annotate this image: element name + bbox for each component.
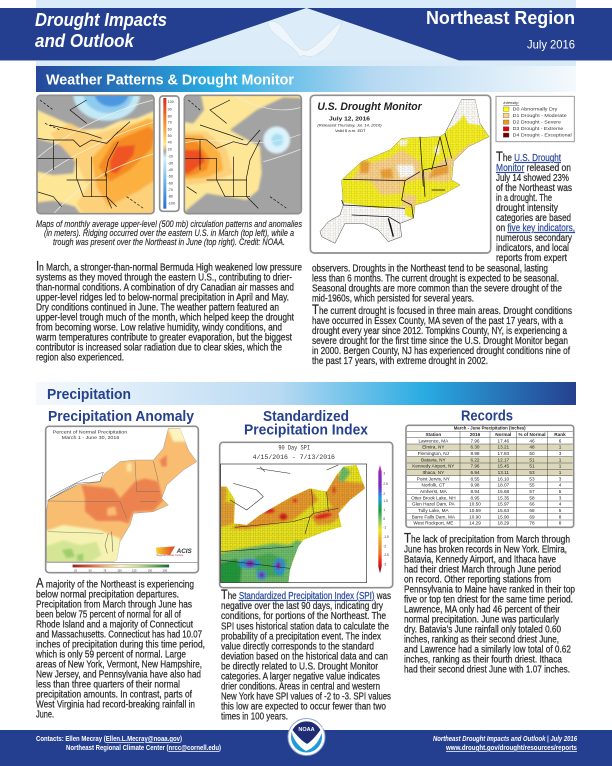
text: records narrative: normal precipitation. June was particularly — [404, 614, 559, 626]
table: March-June precipitation records: Norfolk, CT — [422, 483, 445, 488]
table: March-June precipitation records: 17.46 — [498, 438, 510, 443]
legend: drought intensity: D4 Drought - Exceptional — [513, 133, 572, 138]
icon: NOAA logo: NOAA — [298, 727, 315, 733]
map: March upper-level anomalies — [36, 94, 155, 214]
table: March-June precipitation records: 6.22 — [470, 457, 480, 462]
table: March-June precipitation records: 4 — [559, 483, 562, 488]
panel: percent of normal precipitation map: March 1 - June 30, 2016 — [62, 435, 120, 440]
text: U.S. Drought Monitor narrative: categories are based — [496, 213, 571, 224]
text: records narrative: June has broken records in New York. Elmira, — [404, 544, 567, 556]
text: current drought areas: drought every year since 2012. Tompkins County, NY, is experiencing a — [312, 326, 567, 337]
header: navy banner with triangle cut-out — [0, 8, 612, 60]
text: U.S. Drought Monitor narrative: of the Northeast was — [496, 183, 572, 194]
icon: NOAA bird watermark — [268, 21, 342, 57]
text: SPI narrative: negative over the last 90 days, indicating dry — [221, 601, 383, 612]
text: SPI narrative: SPI uses historical station data to calculate the — [221, 622, 389, 632]
table: March-June precipitation records — [406, 425, 574, 527]
legend: SPI scale — [378, 465, 389, 573]
section banner: Precipitation: Precipitation — [47, 386, 131, 403]
panel: percent of normal precipitation map — [43, 425, 198, 573]
panel: percent of normal precipitation map: Percent of Normal Precipitation — [53, 429, 128, 434]
text: records narrative — [404, 530, 575, 676]
text: U.S. Drought Monitor narrative: Monitor released on — [496, 163, 571, 174]
text: records narrative: Pennsylvania to Maine have ranked in their top — [404, 584, 575, 596]
table: March-June precipitation records: 7.96 — [470, 464, 480, 469]
text: March through June weather patterns: Dry conditions continued in June. The weather pattern featured an — [36, 302, 279, 314]
panel: U.S. Drought Monitor map — [310, 95, 492, 253]
table: March-June precipitation records: 8.98 — [470, 451, 480, 456]
legend: anomaly colour scale: -60 — [168, 181, 173, 185]
table: March-June precipitation records: 12.17 — [498, 457, 510, 462]
text: precipitation anomaly narrative: June. — [36, 710, 54, 720]
section banner: Precipitation — [36, 382, 576, 405]
legend: SPI scale: -3 — [383, 563, 386, 567]
legend: percent of normal scale: 200 — [163, 568, 168, 572]
table: March-June precipitation records: Elmira, NY — [422, 445, 444, 450]
legend: anomaly colour scale: 100 — [168, 100, 174, 104]
legend: anomaly colour scale: 20 — [168, 148, 172, 152]
table: March-June precipitation records: March - June Precipitation (inches) — [454, 426, 526, 431]
table: March-June precipitation records: 8.94 — [470, 489, 480, 494]
table: March-June precipitation records: 7.96 — [470, 438, 480, 443]
table: March-June precipitation records: 1 — [559, 470, 562, 475]
text: SPI narrative: this low are expected to occur fewer than two — [221, 702, 386, 712]
legend: anomaly colour scale: -100 — [168, 201, 175, 205]
legend: SPI scale: -2 — [383, 544, 386, 548]
text: records narrative: inches, ranking as their fourth driest. Ithaca — [404, 654, 562, 666]
table: March-June precipitation records: 51 — [529, 457, 535, 462]
table: March-June precipitation records: Tully Lake, MA — [418, 508, 450, 513]
legend: drought intensity: D1 Drought - Moderate — [513, 113, 567, 118]
text: current drought areas: severe drought for the first time since the U.S. Drought Monitor began — [312, 336, 568, 347]
table: March-June precipitation records: Glen Hazel Dam, PA — [412, 502, 456, 507]
title: U.S. Drought Monitor: U.S. Drought Monitor — [317, 101, 422, 113]
text: precipitation anomaly narrative: which is only 59 percent of normal. Large — [35, 650, 186, 660]
text: U.S. Drought Monitor narrative: mid-1960s, which persisted for several years. — [312, 294, 474, 304]
table: March-June precipitation records: 8 — [559, 514, 562, 519]
table: March-June precipitation records: 66 — [529, 502, 535, 507]
text: SPI narrative: times in 100 years. — [221, 712, 288, 722]
text: March through June weather patterns: warm temperatures contribute to greater evaporation, but the biggest — [35, 332, 292, 344]
footer: report reference — [433, 734, 578, 752]
text: precipitation anomaly narrative: precipitation amounts. In contrast, parts of — [36, 690, 192, 700]
legend: anomaly colour scale: -30 — [168, 161, 173, 165]
text: SPI narrative: conditions, for portions of the Northeast. The — [221, 611, 386, 622]
text: U.S. Drought Monitor narrative: less than 6 months. The current drought is expected to be seasonal. — [312, 274, 559, 284]
legend: SPI scale: -1 — [383, 525, 386, 529]
caption: circulation map description — [36, 219, 302, 248]
table: March-June precipitation records: 14.29 — [469, 521, 481, 526]
legend: percent of normal scale — [73, 565, 169, 572]
legend: anomaly colour scale: 50 — [168, 134, 172, 138]
text: March through June weather patterns: systems as they moved through the eastern U.S., contributing to drier- — [36, 272, 292, 284]
table: March-June precipitation records: 57 — [529, 489, 535, 494]
table: March-June precipitation records: 8.55 — [470, 476, 480, 481]
text: records narrative: had their driest March through June period — [404, 564, 561, 576]
heading: Drought Impacts and Outlook: and Outlook — [35, 30, 136, 51]
section banner: Weather Patterns & Drought Monitor — [36, 66, 576, 92]
table: March-June precipitation records: 6 — [559, 438, 562, 443]
legend: percent of normal scale: 100 — [117, 568, 122, 572]
legend: percent of normal scale: 125 — [132, 568, 137, 572]
text: precipitation anomaly narrative: areas of New York, Vermont, New Hampshire, — [36, 660, 202, 670]
table: March-June precipitation records: 15.68 — [498, 489, 510, 494]
text: precipitation anomaly narrative — [35, 576, 205, 720]
text: precipitation anomaly narrative: and Massachusetts. Connecticut has had 10.07 — [36, 630, 202, 640]
legend: anomaly colour scale: 80 — [168, 114, 172, 118]
legend: SPI scale: 2.5 — [383, 482, 388, 486]
table: March-June precipitation records: 2016 — [470, 432, 481, 437]
text: March through June weather patterns: contributor is increased solar radiation due to clear skies, which the — [36, 342, 282, 354]
legend: SPI scale: 1 — [383, 508, 385, 512]
legend: anomaly colour scale: 40 — [168, 141, 172, 145]
table: March-June precipitation records: 10.50 — [469, 502, 481, 507]
table: March-June precipitation records: 15.63 — [498, 508, 510, 513]
legend: drought intensity: D2 Drought - Severe — [513, 119, 562, 124]
text: SPI narrative: drier conditions. Areas in central and western — [221, 682, 380, 692]
table: March-June precipitation records: Otter Brook Lake, NH — [411, 495, 456, 500]
table: March-June precipitation records: 6.94 — [470, 470, 480, 475]
text: precipitation anomaly narrative: West Virginia had record-breaking rainfall in — [36, 700, 195, 710]
table: March-June precipitation records: 9.98 — [470, 483, 480, 488]
icon: NOAA logo — [288, 718, 325, 756]
caption: circulation map description: Maps of monthly average upper-level (500 mb) circulation patterns and anomalies — [36, 219, 302, 230]
footer: contacts: Northeast Regional Climate Center (nrcc@cornell.edu) — [66, 743, 221, 752]
panel: 90 day SPI map: 4/15/2016 - 7/13/2016 — [253, 454, 335, 461]
table: March-June precipitation records: 5 — [559, 508, 562, 513]
table: March-June precipitation records: Flemington, NJ — [418, 451, 449, 456]
table: March-June precipitation records: 58 — [529, 495, 535, 500]
table: March-June precipitation records: 50 — [529, 451, 535, 456]
legend: percent of normal scale: 75 — [103, 568, 107, 572]
table: March-June precipitation records: 5 — [559, 489, 562, 494]
table: March-June precipitation records: Amherst, MA — [420, 489, 448, 494]
legend: percent of normal scale: 25 — [74, 568, 77, 572]
table: March-June precipitation records: 15.35 — [498, 495, 510, 500]
legend: anomaly colour scale: -80 — [168, 195, 173, 199]
table: March-June precipitation records: 8.95 — [470, 495, 480, 500]
text: records narrative: five or top ten driest for the same time period. — [404, 594, 573, 606]
table: March-June precipitation records: 68 — [529, 508, 535, 513]
legend: drought intensity: Intensity: — [503, 100, 519, 105]
panel: circulation maps — [36, 94, 302, 214]
heading: Drought Impacts and Outlook — [35, 9, 167, 51]
table: March-June precipitation records: 78 — [529, 521, 535, 526]
text: SPI narrative: deviation based on the historical data and can — [221, 652, 388, 662]
table: March-June precipitation records: West Rockport, ME — [413, 521, 453, 526]
text: records narrative: Batavia, Kennedy Airport, and Ithaca have — [404, 554, 556, 566]
text: March through June weather patterns: region also experienced. — [36, 352, 124, 364]
text: current drought areas: in 2000. Bergen County, NJ has experienced drought conditions nine of — [312, 346, 570, 357]
table: March-June precipitation records: 53 — [529, 470, 535, 475]
table: March-June precipitation records: 1 — [559, 464, 562, 469]
table: March-June precipitation records: 46 — [529, 438, 535, 443]
text: precipitation anomaly narrative: A majority of the Northeast is experiencing — [36, 576, 194, 590]
text: SPI narrative: value directly corresponds to the standard — [221, 642, 374, 652]
text: precipitation anomaly narrative: inches of precipitation during this time period, — [36, 640, 205, 650]
legend: percent of normal scale: 50 — [89, 568, 92, 572]
table: March-June precipitation records: 17.83 — [498, 451, 510, 456]
legend: anomaly colour scale: 90 — [168, 107, 172, 111]
legend: anomaly colour scale: -40 — [168, 168, 173, 172]
text: current drought areas: The current drought is focused in three main areas. Drought conditions — [312, 302, 572, 317]
heading: Northeast Region: Northeast Region — [426, 8, 575, 28]
legend: SPI scale: -2.5 — [383, 553, 389, 557]
text: precipitation anomaly narrative: below normal precipitation departures. — [36, 590, 179, 600]
table: March-June precipitation records: 10.90 — [469, 514, 481, 519]
table: March-June precipitation records: 18.07 — [498, 483, 510, 488]
logo: ACIS: Regional Climate Centers — [157, 554, 184, 557]
header: pale blue backdrop — [36, 0, 576, 66]
table: March-June precipitation records: 3 — [559, 495, 562, 500]
text: records narrative: and Lawrence had a similarly low total of 0.62 — [404, 644, 571, 656]
section banner: Weather Patterns & Drought Monitor: Weather Patterns & Drought Monitor — [46, 72, 294, 88]
text: U.S. Drought Monitor narrative: July 14 showed 23% — [496, 173, 569, 184]
legend: drought intensity: D0 Abnormally Dry — [513, 107, 558, 112]
legend: anomaly colour scale: 70 — [168, 121, 172, 125]
table: March-June precipitation records: % of Normal — [518, 432, 546, 437]
legend: drought intensity: D3 Drought - Extreme — [513, 126, 564, 131]
text: U.S. Drought Monitor narrative: indicators, and local — [496, 243, 569, 254]
table: March-June precipitation records: 53 — [529, 476, 535, 481]
footer: report reference: www.drought.gov/drought/resources/reports — [445, 743, 577, 752]
table: March-June precipitation records: Normal — [495, 432, 511, 437]
text: precipitation anomaly narrative: less than three quarters of their normal — [36, 680, 180, 690]
logo: ACIS: ACIS — [176, 548, 193, 555]
heading: Standardized Precipitation Index: Standardized — [263, 408, 349, 425]
legend: anomaly colour scale: -50 — [168, 175, 173, 179]
table: March-June precipitation records: 69 — [529, 514, 535, 519]
title: U.S. Drought Monitor: Valid 8 a.m. EDT — [335, 129, 367, 133]
text: U.S. Drought Monitor narrative — [312, 149, 575, 304]
footer: contacts — [36, 734, 221, 752]
table: March-June precipitation records: Lawrence, MA — [418, 438, 449, 443]
text: SPI narrative: categories. A larger negative value indicates — [221, 672, 380, 682]
table: March-June precipitation records: 16.10 — [498, 476, 510, 481]
table: March-June precipitation records: 15.90 — [498, 514, 510, 519]
table: March-June precipitation records: 1 — [559, 445, 562, 450]
legend: SPI scale: 2 — [383, 492, 385, 496]
text: records narrative: on record. Other reporting stations from — [404, 574, 551, 586]
caption: circulation map description: trough was present over the Northeast in June (top right). Credit: NOAA. — [53, 237, 285, 248]
heading: Standardized Precipitation Index: Precipitation Index — [244, 422, 369, 438]
text: precipitation anomaly narrative: Precipitation from March through June has — [36, 600, 192, 610]
table: March-June precipitation records: Kennedy Airport, NY — [412, 464, 454, 469]
text: U.S. Drought Monitor narrative: drought intensity — [496, 203, 558, 214]
text: U.S. Drought Monitor narrative: observers. Droughts in the Northeast tend to be seasonal, lasting — [312, 264, 548, 274]
table: March-June precipitation records: Rank — [554, 432, 566, 437]
table: March-June precipitation records: 10.59 — [469, 508, 481, 513]
title: U.S. Drought Monitor: July 12, 2016 — [329, 117, 370, 123]
text: current drought areas — [312, 302, 572, 367]
footer: report reference: Northeast Drought Impacts and Outlook | July 2016 — [433, 734, 578, 743]
legend: anomaly colour scale — [160, 96, 179, 211]
caption: circulation map description: (in meters). Ridging occurred over the eastern U.S. in March (top left), while a — [44, 228, 294, 239]
footer: contacts: Contacts: Ellen Mecray (Ellen.L.Mecray@noaa.gov) — [36, 734, 182, 743]
table: March-June precipitation records: 4 — [559, 502, 562, 507]
table: March-June precipitation records: Ithaca, NY — [422, 470, 444, 475]
text: March through June weather patterns: In March, a stronger-than-normal Bermuda High weakened low pressure — [36, 258, 302, 274]
table: March-June precipitation records: 8 — [559, 521, 562, 526]
legend: SPI scale: 0 — [383, 517, 385, 521]
text: March through June weather patterns: than-normal conditions. A combination of dry Canadian air masses and — [36, 282, 294, 294]
footer band — [0, 730, 612, 766]
text: U.S. Drought Monitor narrative: reports from expert — [496, 253, 567, 264]
text: March through June weather patterns: upper-level ridges led to below-normal precipitation in April and May. — [36, 292, 289, 304]
text: U.S. Drought Monitor narrative: in a drought. The — [496, 193, 552, 204]
text: SPI narrative: New York have SPI values of -2 to -3. SPI values — [221, 692, 391, 702]
panel: 90 day SPI map — [217, 442, 393, 588]
legend: percent of normal scale: 150 — [148, 568, 153, 572]
text: March through June weather patterns — [35, 258, 302, 364]
text: current drought areas: have occurred in Essex County, MA seven of the past 17 years, with a — [312, 316, 563, 327]
table: March-June precipitation records: 3 — [559, 451, 562, 456]
text: SPI narrative — [221, 587, 391, 722]
map: drought categories by county — [318, 97, 492, 247]
legend: SPI scale: 1.5 — [383, 499, 388, 503]
text: current drought areas: the past 17 years, with extreme drought in 2002. — [312, 356, 488, 367]
text: records narrative: inches, ranking as their second driest June, — [404, 634, 559, 646]
heading: Precipitation Anomaly: Precipitation Anomaly — [48, 408, 195, 425]
table: March-June precipitation records: Station — [425, 432, 441, 437]
text: U.S. Drought Monitor narrative: The U.S. Drought — [496, 149, 561, 164]
legend: SPI scale: 3 — [383, 472, 385, 476]
legend: anomaly colour scale: -70 — [168, 188, 173, 192]
table: March-June precipitation records: 13.11 — [498, 470, 509, 475]
text: records narrative: The lack of precipitation from March through — [404, 530, 570, 546]
text: records narrative: Lawrence, MA only had 46 percent of their — [404, 604, 561, 616]
heading: Records: Records — [461, 408, 513, 424]
table: March-June precipitation records: 13.21 — [498, 445, 510, 450]
title: U.S. Drought Monitor: (Released Thursday, Jul. 14, 2016) — [317, 123, 382, 127]
table: March-June precipitation records: Batavia, NY — [421, 457, 446, 462]
table: March-June precipitation records: 48 — [529, 445, 535, 450]
logo: ACIS — [156, 546, 193, 557]
text: March through June weather patterns: upper-level trough much of the month, which helped keep the drought — [36, 312, 294, 324]
text: U.S. Drought Monitor narrative: numerous secondary — [496, 233, 572, 244]
text: SPI narrative: The Standardized Precipitation Index (SPI) was — [221, 587, 391, 602]
legend: drought intensity — [496, 96, 574, 142]
text: records narrative: had their second driest June with 1.07 inches. — [404, 664, 570, 676]
text: precipitation anomaly narrative: Rhode Island and a majority of Connecticut — [36, 620, 193, 630]
map: June upper-level anomalies — [184, 94, 302, 214]
panel: 90 day SPI map: 90 Day SPI — [278, 445, 310, 452]
heading: Standardized Precipitation Index — [244, 408, 369, 438]
heading: Drought Impacts and Outlook: Drought Impacts — [35, 9, 167, 30]
text: precipitation anomaly narrative: New Jersey, and Pennsylvania have also had — [36, 670, 201, 680]
table: March-June precipitation records: 55 — [529, 483, 535, 488]
legend: SPI scale: -1.5 — [383, 535, 389, 539]
table: March-June precipitation records: Point Jervis, NY — [417, 476, 450, 481]
text: records narrative: dry. Batavia’s June rainfall only totaled 0.60 — [404, 624, 561, 636]
table: March-June precipitation records: 15.97 — [498, 502, 510, 507]
table: March-June precipitation records: 15.45 — [498, 464, 510, 469]
text: U.S. Drought Monitor narrative: on five key indicators, — [496, 223, 575, 234]
table: March-June precipitation records: 18.29 — [498, 521, 510, 526]
text: SPI narrative: be directly related to U.S. Drought Monitor — [221, 662, 379, 672]
title: U.S. Drought Monitor — [317, 101, 422, 133]
legend: anomaly colour scale: -20 — [168, 155, 173, 159]
text: U.S. Drought Monitor narrative: Seasonal droughts are more common than the severe drought of the — [312, 284, 562, 294]
legend: anomaly colour scale: 60 — [168, 127, 172, 131]
text: March through June weather patterns: from becoming worse. Low relative humidity, windy conditions, and — [36, 322, 282, 334]
table: March-June precipitation records: 6.30 — [470, 445, 480, 450]
text: SPI narrative: probability of a precipitation event. The index — [221, 632, 381, 642]
date: July 2016: July 2016 — [527, 38, 575, 52]
text: precipitation anomaly narrative: been below 75 percent of normal for all of — [36, 610, 181, 620]
table: March-June precipitation records: 1 — [559, 457, 562, 462]
table: March-June precipitation records: 51 — [529, 464, 535, 469]
table: March-June precipitation records: 3 — [559, 476, 562, 481]
table: March-June precipitation records: Barre Falls Dam, MA — [412, 514, 456, 519]
